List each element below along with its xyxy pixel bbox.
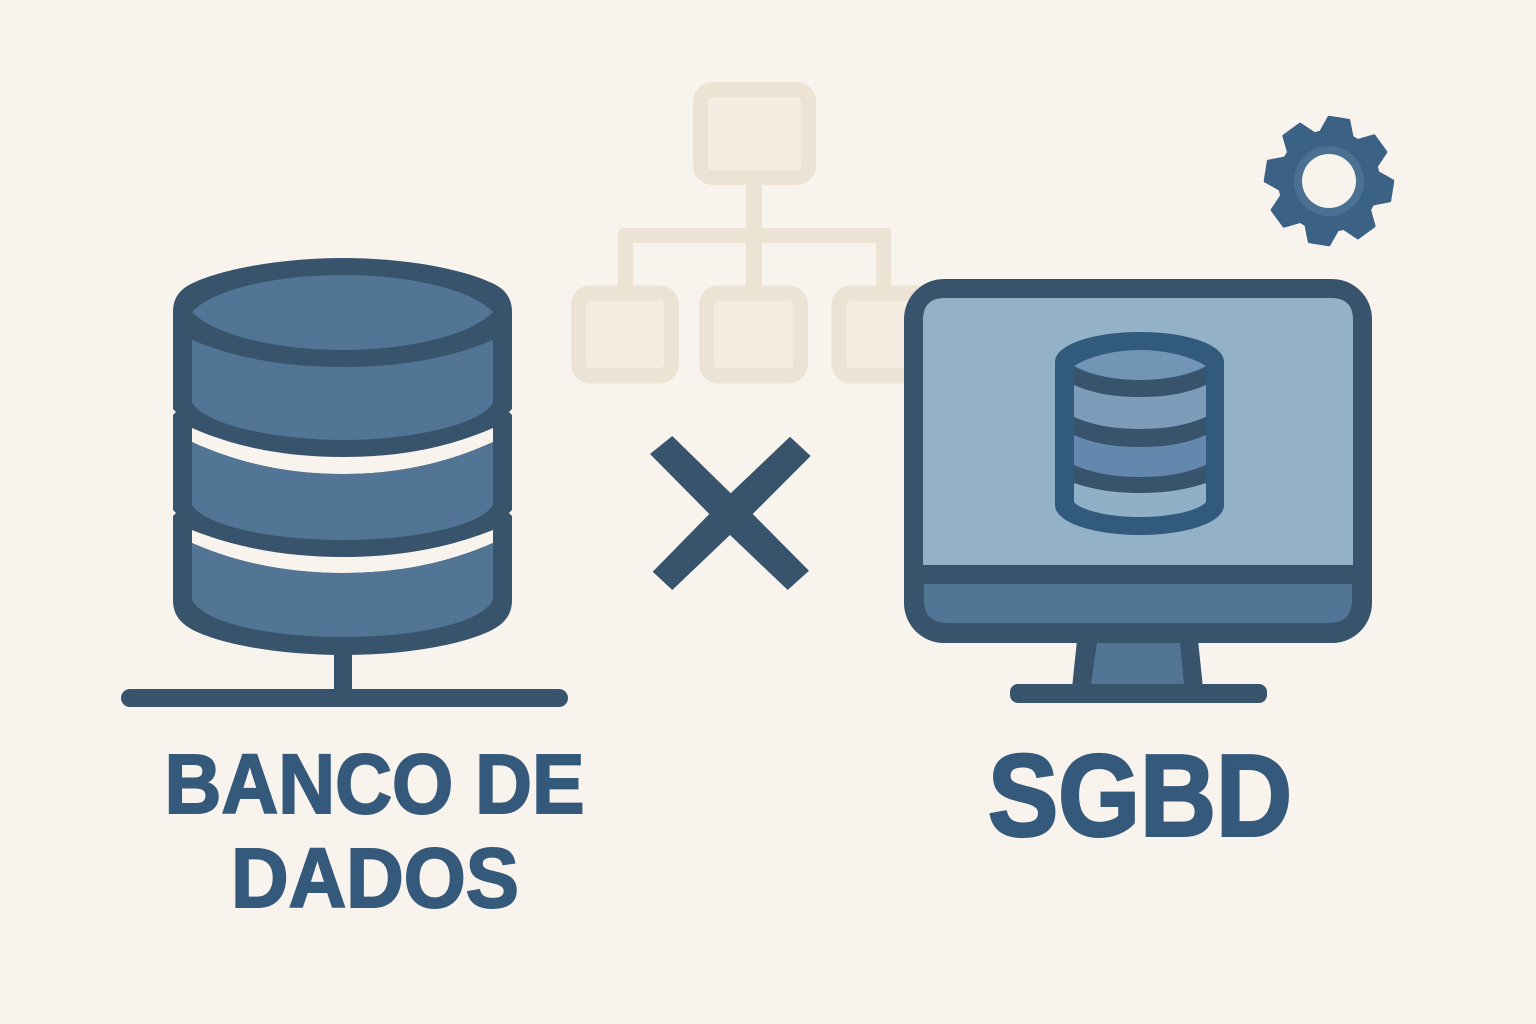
icon: monitor (904, 279, 1372, 703)
first highlight (192, 428, 493, 474)
monitor stand (1072, 640, 1203, 688)
icon: multiplication cross (650, 436, 811, 590)
gear hole (1302, 154, 1356, 208)
stem (334, 650, 352, 692)
icon: gear (1264, 116, 1394, 246)
side notches (172, 408, 513, 517)
cylinder silhouette (173, 258, 512, 655)
stand inner (1091, 643, 1184, 684)
gear body (1278, 130, 1380, 232)
icon: hierarchy diagram (578, 90, 929, 376)
monitor base (1010, 684, 1267, 703)
small database icon (1055, 332, 1224, 535)
monitor chin (924, 584, 1352, 623)
label: banco de dados: DADOS (231, 831, 519, 925)
label: banco de dados (164, 737, 584, 925)
monitor frame (904, 279, 1372, 643)
second highlight (192, 530, 493, 573)
icon: database cylinder (121, 258, 568, 707)
label: banco de dados: BANCO DE (164, 737, 584, 831)
gear teeth (1264, 116, 1394, 246)
base line (121, 689, 568, 707)
middle segment (192, 442, 493, 540)
label: SGBD: SGBD (988, 730, 1292, 860)
monitor screen (923, 298, 1353, 565)
bottom segment (192, 543, 493, 637)
cylinder top disk (192, 275, 493, 350)
gear ring (1294, 146, 1364, 216)
top segment (192, 340, 493, 440)
